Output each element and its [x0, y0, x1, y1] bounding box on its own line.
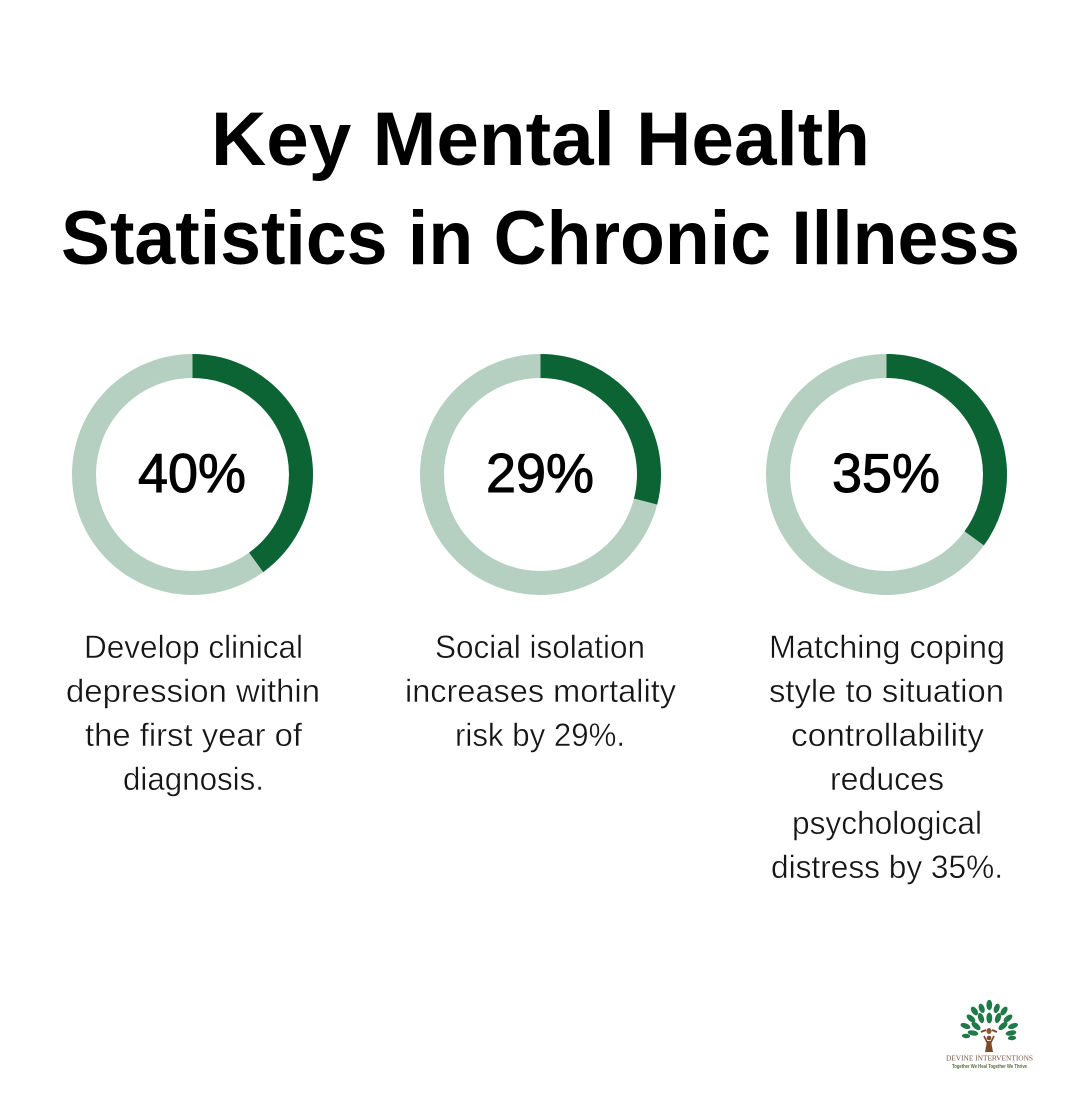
tagline: Together We Heal Together We Thrive — [952, 1064, 1027, 1070]
donut chart: 40% — [84, 366, 301, 583]
description: 40%: Develop clinical — [84, 629, 303, 665]
panel: 40% statistic — [66, 366, 320, 797]
description: 40%: depression within — [66, 673, 320, 709]
logo: Devine Interventions — [946, 1000, 1033, 1070]
panel: 29% statistic — [405, 366, 676, 753]
title — [61, 97, 1020, 281]
brand name: DEVINE INTERVENTIONS — [946, 1054, 1033, 1062]
panel: 35% statistic — [769, 366, 1005, 885]
description: 29% — [405, 629, 676, 753]
title: Statistics in Chronic Illness — [61, 196, 1020, 281]
description: 35%: style to situation — [769, 673, 1004, 709]
description: 40%: the first year of — [85, 717, 302, 753]
donut chart: 35% — [778, 366, 995, 583]
description: 35%: Matching coping — [769, 629, 1005, 665]
value: 40%: 40% — [138, 442, 246, 504]
description: 35% — [769, 629, 1005, 885]
value: 35%: 35% — [832, 442, 940, 504]
description: 35%: psychological — [792, 805, 982, 841]
icon: tree leaves — [960, 1000, 1019, 1041]
value: 29%: 29% — [486, 442, 594, 504]
description: 29%: Social isolation — [435, 629, 645, 665]
description: 40% — [66, 629, 320, 797]
description: 35%: distress by 35%. — [771, 849, 1003, 885]
description: 40%: diagnosis. — [123, 761, 264, 797]
description: 35%: controllability — [791, 717, 984, 753]
donut chart: 29% — [432, 366, 649, 583]
icon: tree trunk figure — [981, 1028, 997, 1052]
description: 35%: reduces — [830, 761, 944, 797]
description: 29%: increases mortality — [405, 673, 676, 709]
description: 29%: risk by 29%. — [455, 717, 625, 753]
title: Key Mental Health — [211, 97, 870, 182]
